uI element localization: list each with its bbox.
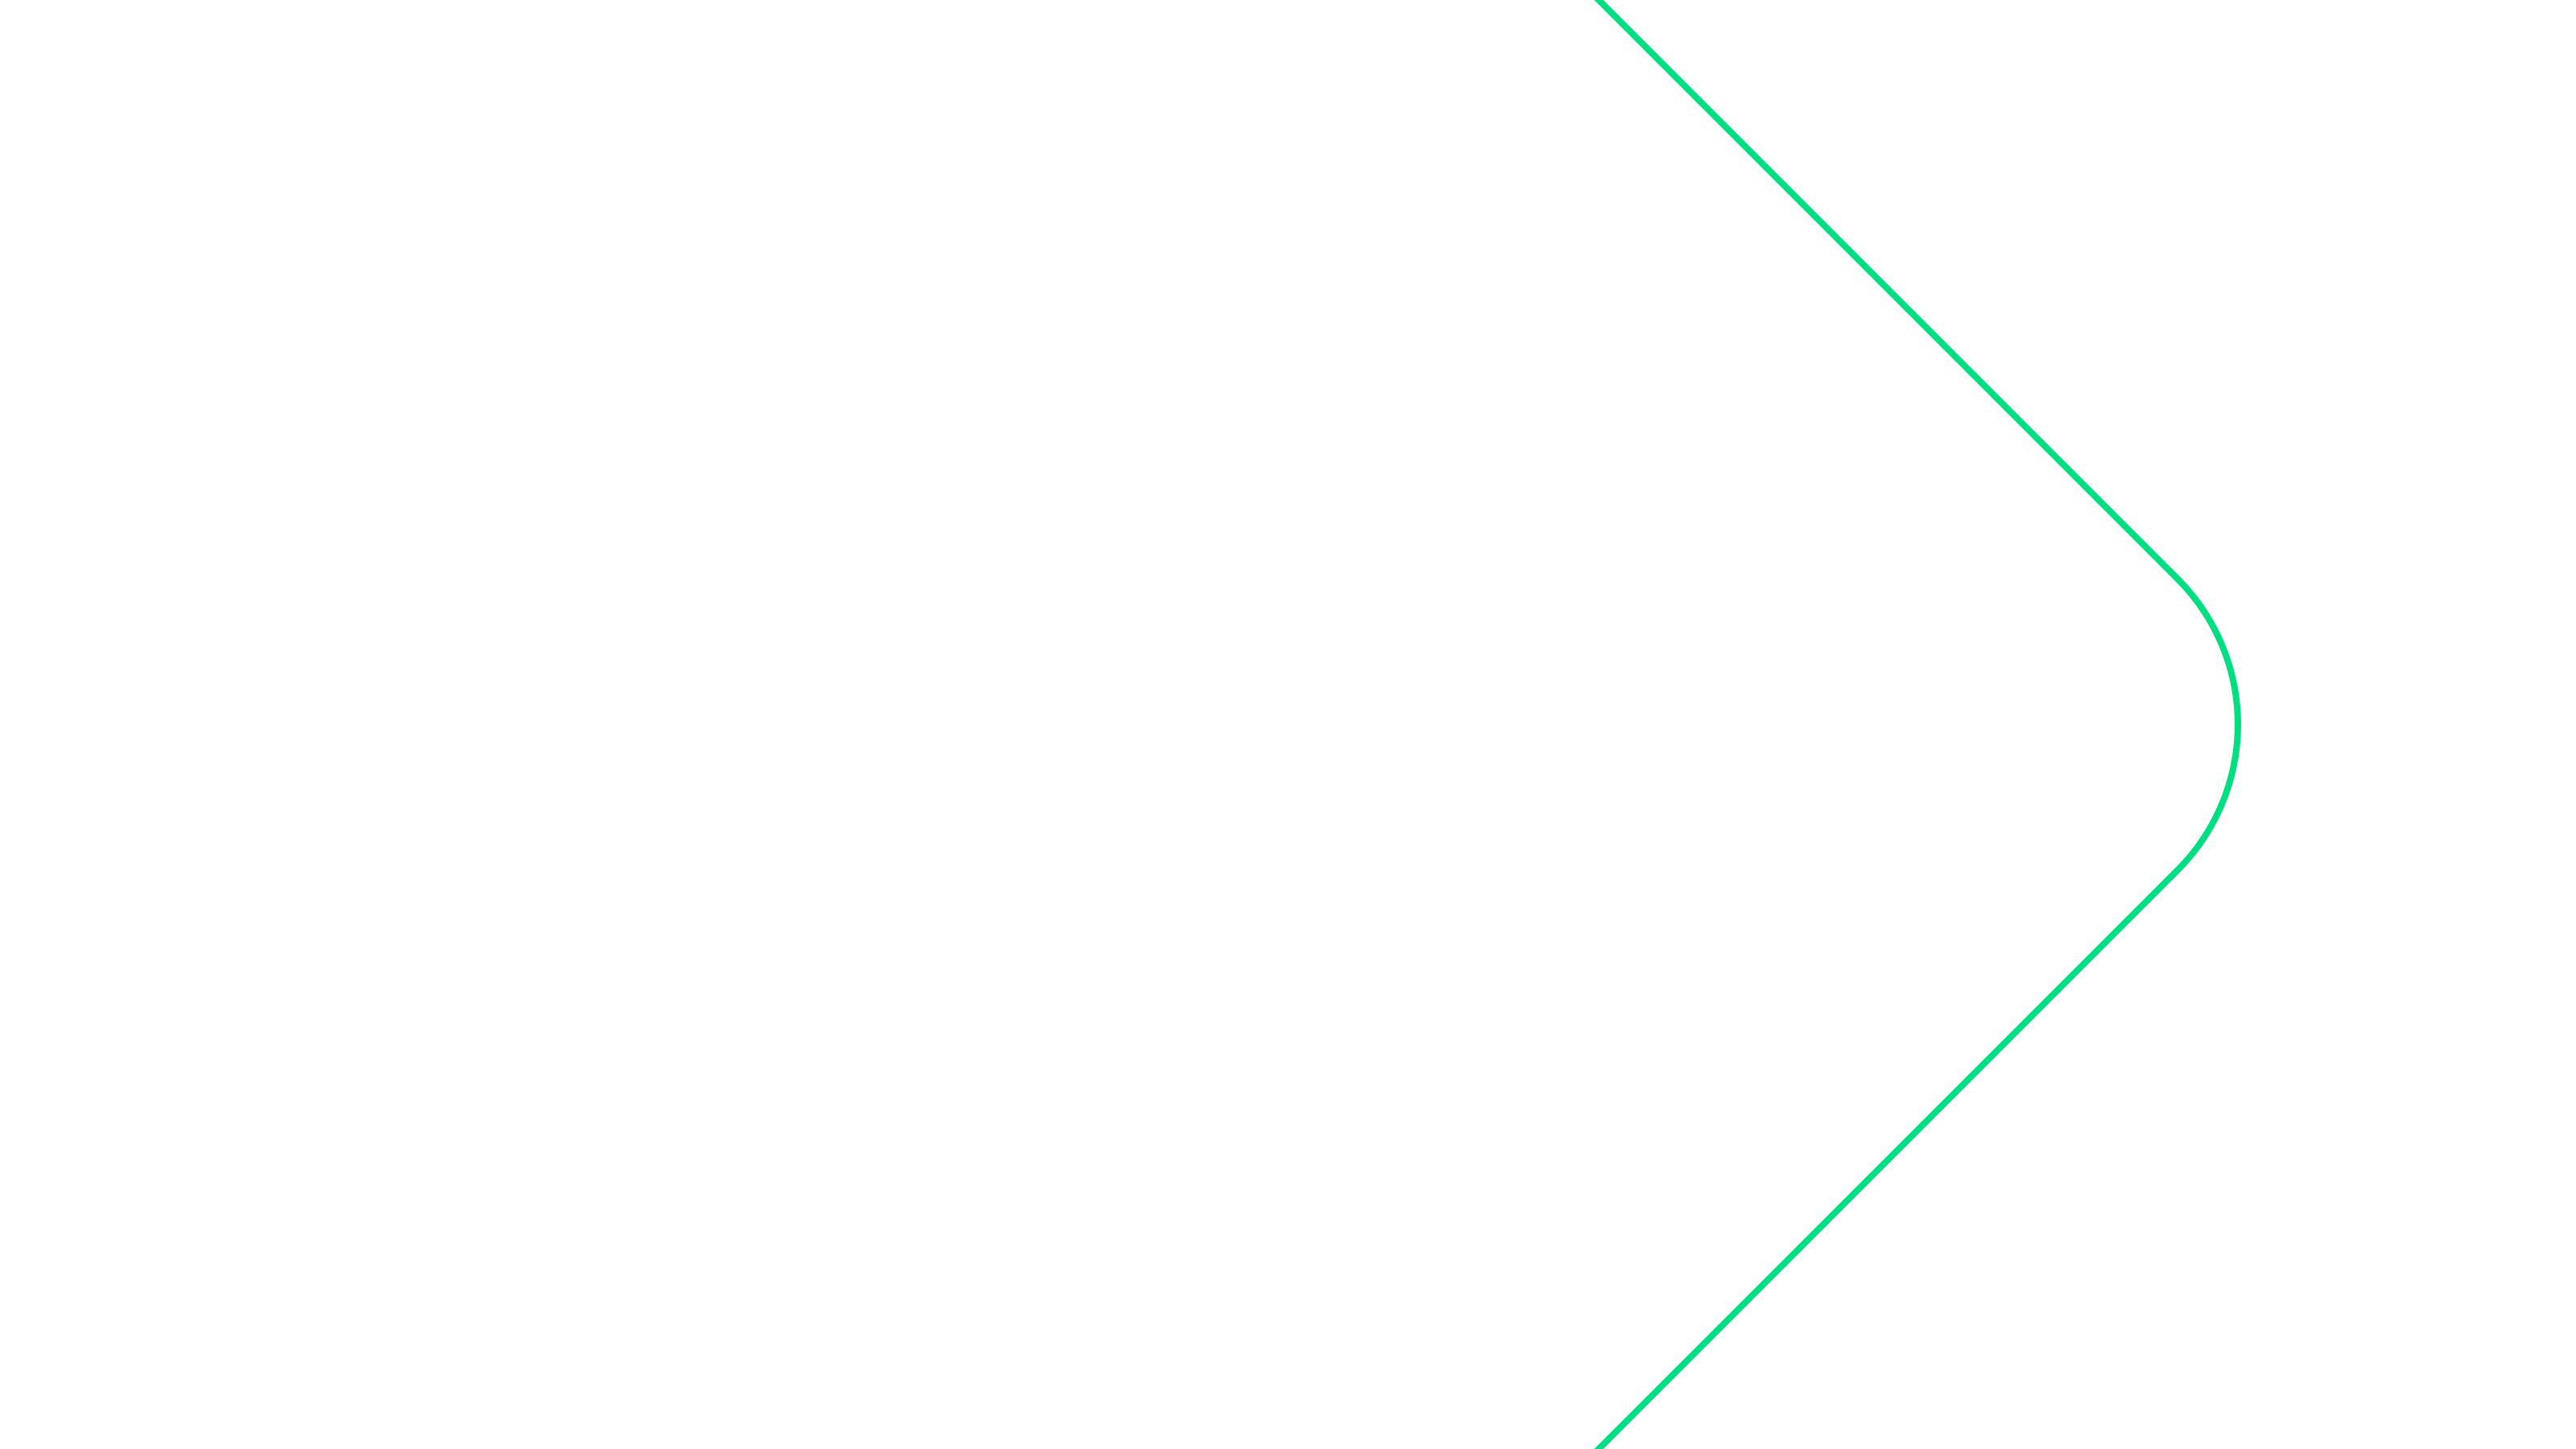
arrow: green rounded chevron outline (1591, 0, 2238, 1449)
